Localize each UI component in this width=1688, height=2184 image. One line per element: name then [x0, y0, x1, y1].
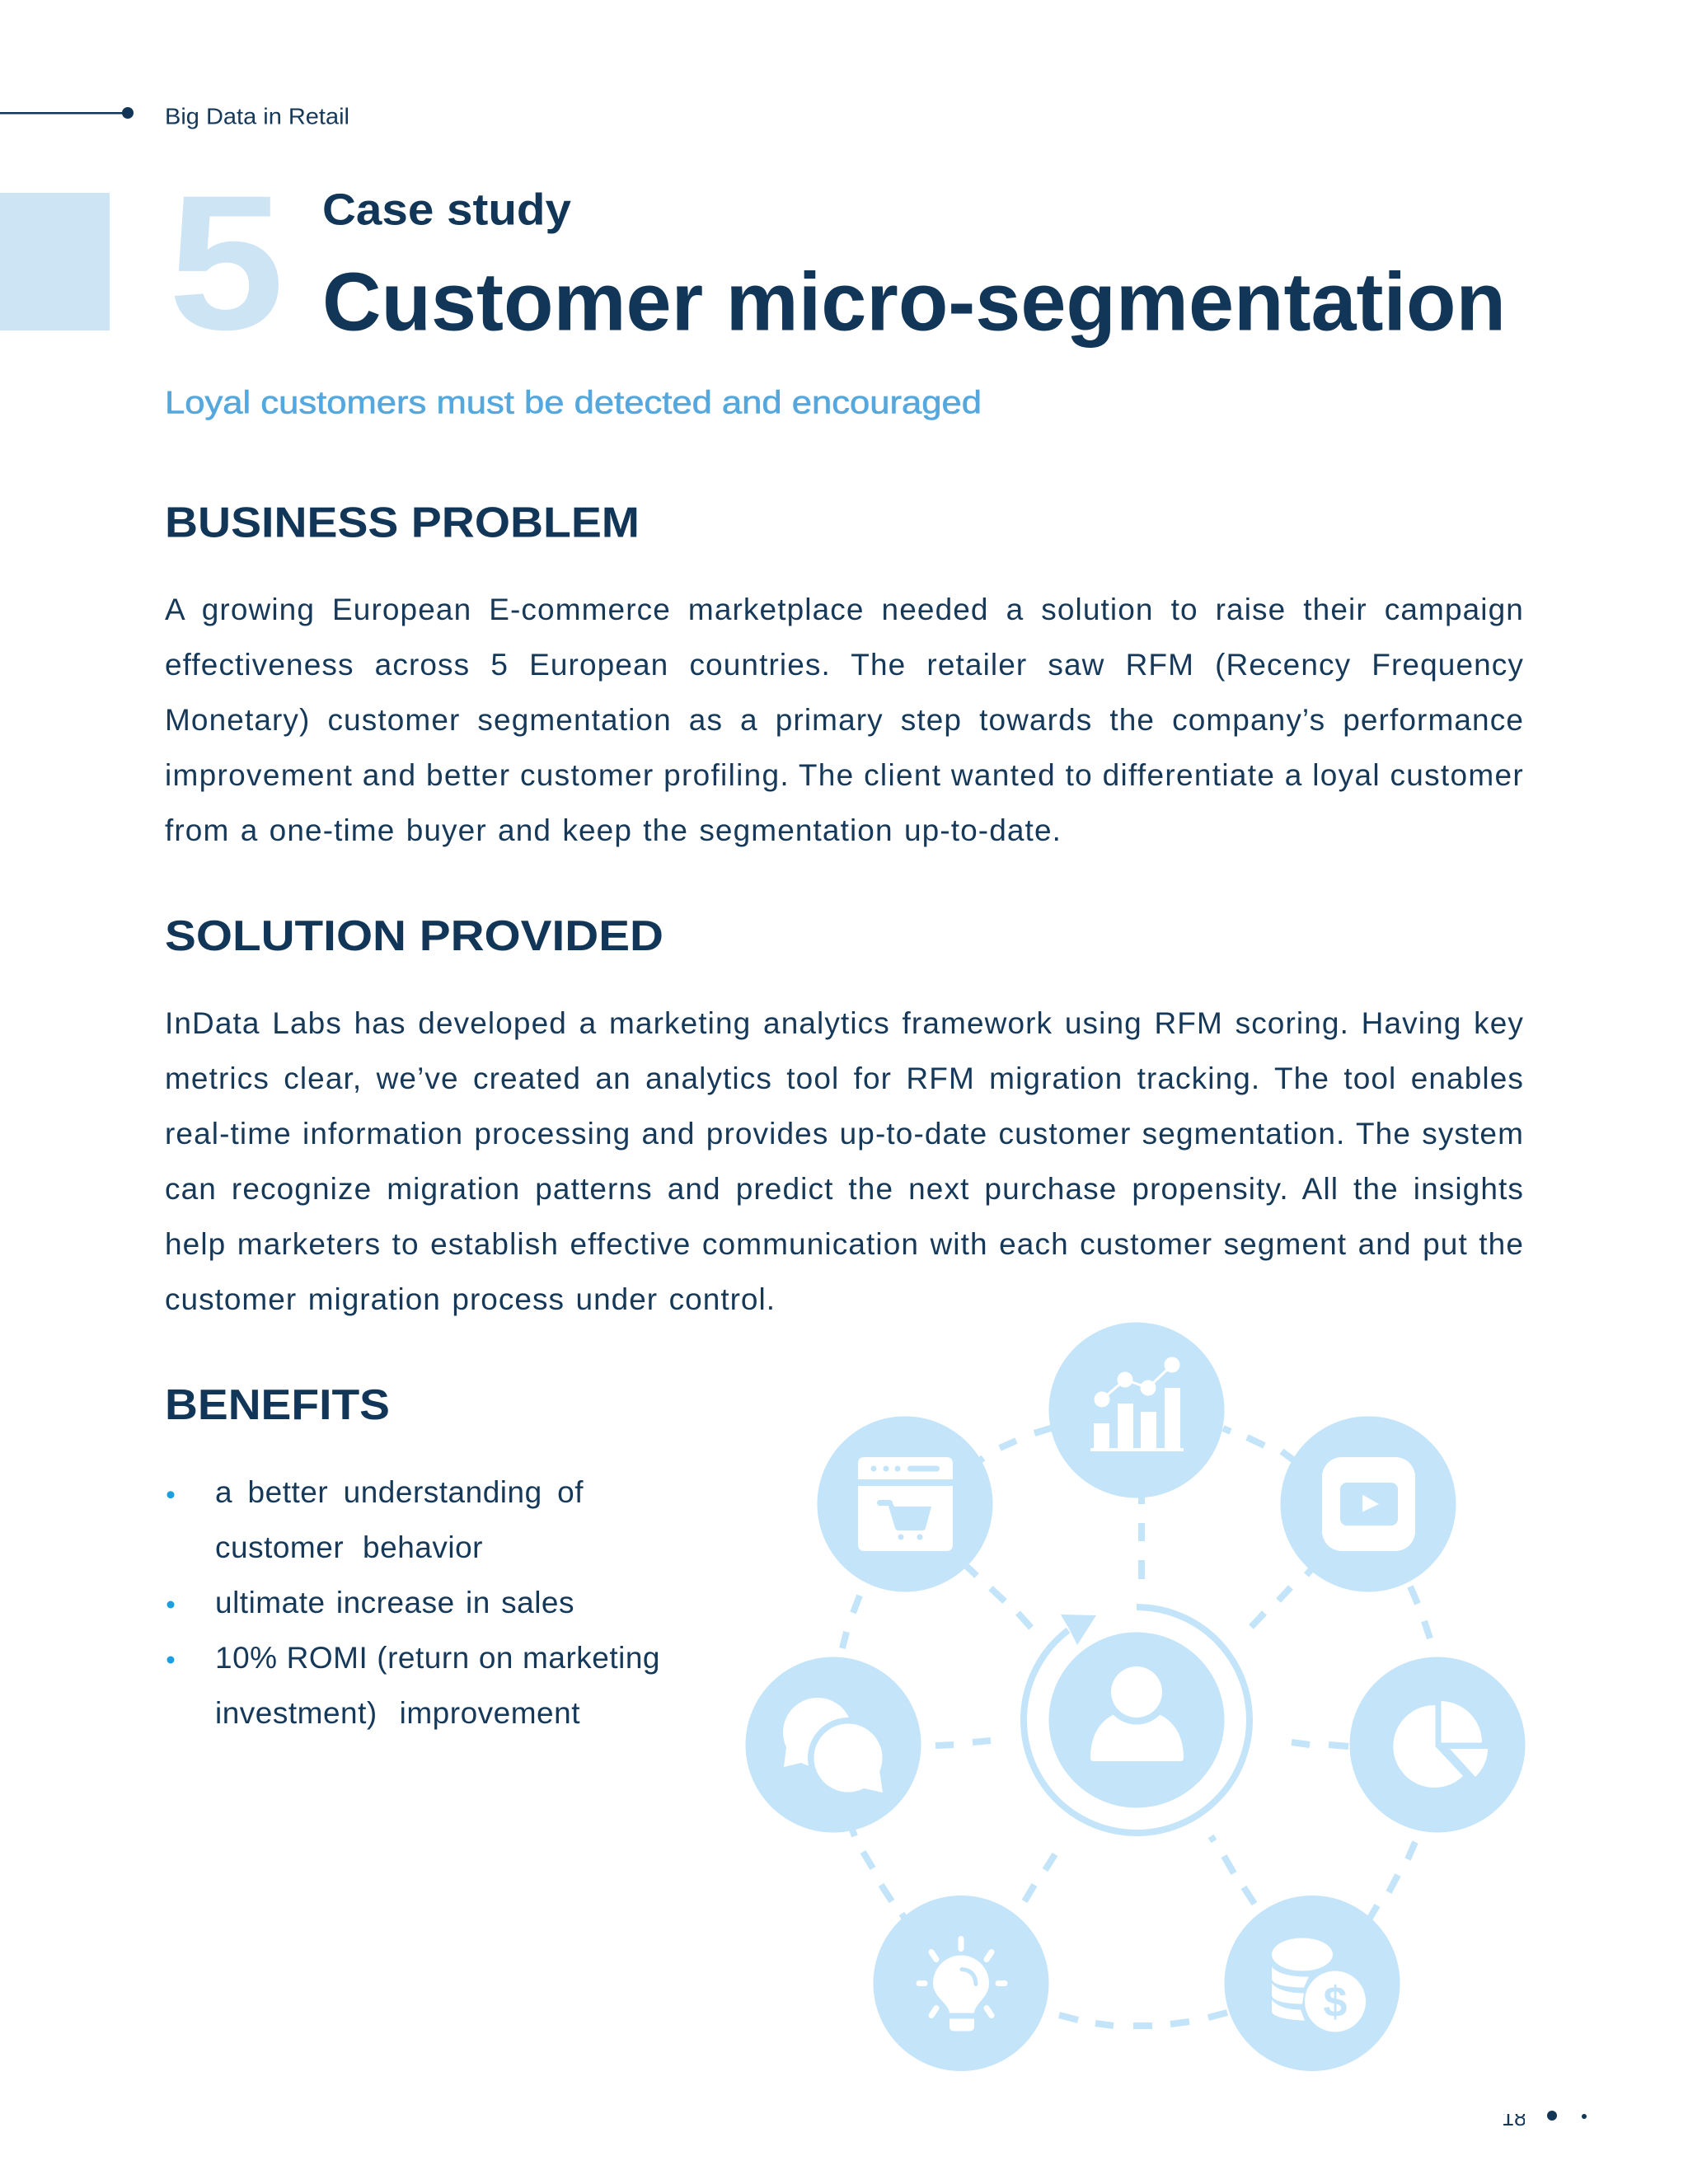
text block: solution provided: real-time information processing and provides up-to-date customer segmentation. The system	[165, 1117, 1524, 1151]
list: benefits: customer behavior	[215, 1530, 483, 1564]
header line with dot	[0, 107, 134, 119]
running header label: Big Data in Retail	[165, 104, 349, 129]
list: benefits: 10% ROMI (return on marketing	[215, 1641, 660, 1675]
text block: business problem: A growing European E-commerce marketplace needed a solution to raise their campaign	[165, 593, 1524, 626]
icon: idea bulb	[874, 1896, 1048, 2071]
text block: business problem: improvement and better customer profiling. The client wanted to differentiate a loyal customer	[165, 758, 1524, 792]
icon: pie chart	[1350, 1657, 1525, 1833]
text block: business problem	[165, 593, 1524, 847]
text block: solution provided: can recognize migration patterns and predict the next purchase propensity. All the insights	[165, 1172, 1524, 1206]
list: benefits	[215, 1475, 660, 1730]
icon: analytics chart	[1048, 1322, 1225, 1498]
eyebrow: case study: Case study	[322, 185, 571, 234]
heading: benefits: BENEFITS	[165, 1381, 390, 1429]
text block: solution provided: InData Labs has developed a marketing analytics framework using RFM scoring. Having key	[165, 1006, 1524, 1040]
text block: business problem: effectiveness across 5 European countries. The retailer saw RFM (Recency Frequency	[165, 648, 1524, 682]
text block: solution provided	[165, 1006, 1524, 1316]
icon: chat bubbles	[745, 1657, 921, 1833]
page dots	[1547, 2111, 1587, 2121]
heading: solution provided: SOLUTION PROVIDED	[165, 912, 663, 960]
centre ring with arrow	[1024, 1607, 1250, 1833]
list: benefits: investment) improvement	[215, 1696, 580, 1730]
network diagram	[745, 1322, 1525, 2071]
icon: customer (centre)	[1048, 1632, 1225, 1808]
benefit bullets	[166, 1491, 175, 1663]
list: benefits: a better understanding of	[215, 1475, 584, 1509]
text block: solution provided: help marketers to establish effective communication with each customer segment and put the	[165, 1227, 1524, 1261]
subtitle: Loyal customers must be detected and encouraged	[165, 386, 982, 420]
section number 5: 5	[168, 156, 284, 370]
icon: coins	[1225, 1896, 1400, 2071]
text block: business problem: Monetary) customer segmentation as a primary step towards the company’s performance	[165, 703, 1524, 737]
heading: business problem: BUSINESS PROBLEM	[165, 499, 640, 547]
icon: coins: $	[1324, 1978, 1348, 2026]
text block: solution provided: customer migration process under control.	[165, 1282, 776, 1316]
text block: business problem: from a one-time buyer and keep the segmentation up-to-date.	[165, 813, 1062, 847]
list: benefits: ultimate increase in sales	[215, 1586, 574, 1619]
icon: online shop	[818, 1416, 992, 1592]
dashed connectors	[842, 1428, 1430, 2026]
icon: video player	[1281, 1416, 1456, 1592]
text block: solution provided: metrics clear, we’ve created an analytics tool for RFM migration tracking. The tool enables	[165, 1062, 1524, 1095]
title: Customer micro-segmentation	[322, 255, 1506, 348]
decorative blue block	[0, 193, 110, 330]
